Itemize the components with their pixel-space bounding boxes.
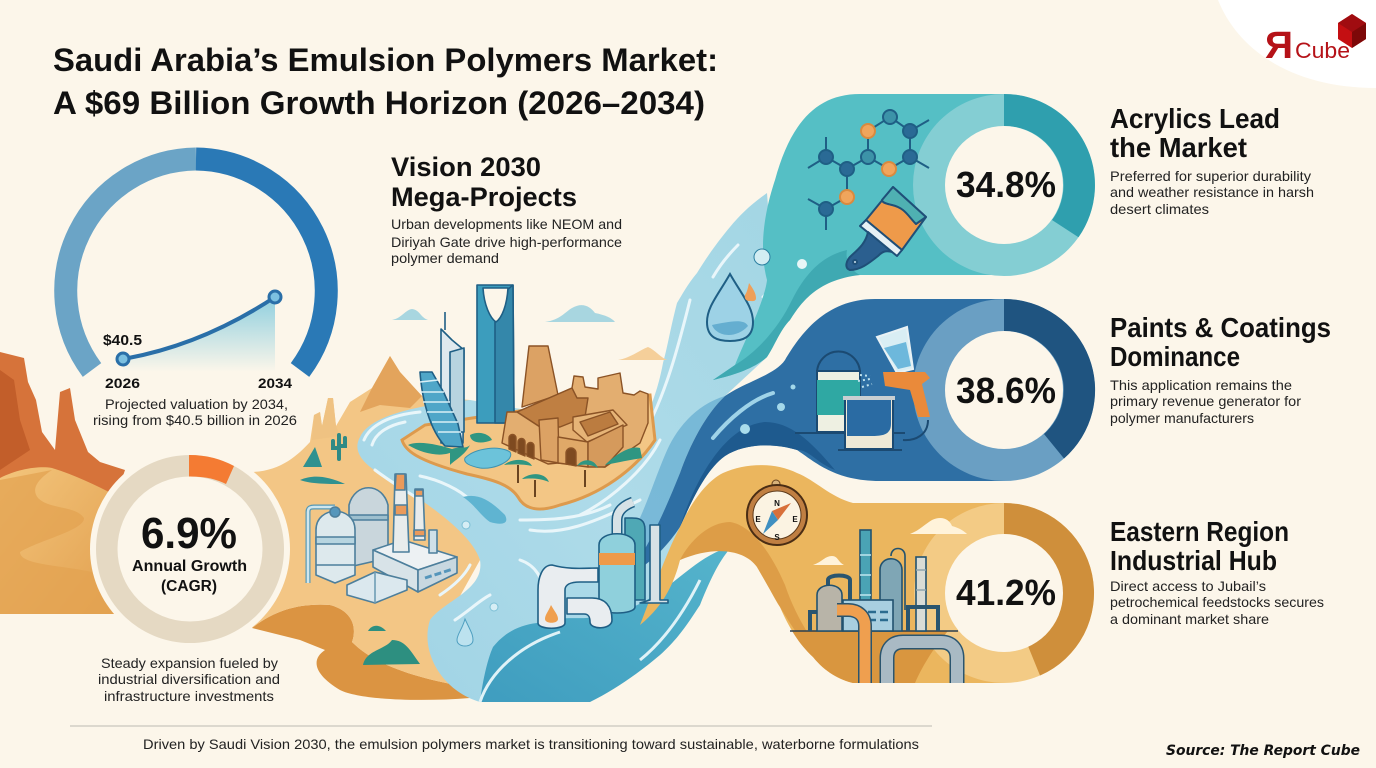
- text: Acrylics description: and weather resistance in harsh: [1110, 184, 1314, 200]
- gauge caption: Projected valuation by 2034,: [105, 396, 288, 412]
- heading: Vision 2030: Mega-Projects: [391, 182, 577, 212]
- chart: growth curve: [117, 291, 281, 372]
- donut: CAGR: Annual Growth: [132, 558, 247, 575]
- donut: 34.8%: [913, 94, 1095, 276]
- footer divider: [70, 725, 932, 727]
- icon: paint brush: [846, 187, 926, 270]
- icon: Diriyah mud-brick fort: [502, 346, 648, 467]
- sand ground with mountains and cactus: [250, 356, 560, 700]
- heading: Acrylics: [1110, 103, 1280, 163]
- icon: Kingdom Centre tower and skyscrapers: [420, 285, 514, 447]
- donut: 41.2%: 41.2%: [956, 572, 1056, 613]
- icon: compass: [747, 480, 807, 545]
- icon: compass: E: [755, 515, 761, 524]
- icon: pipelines: [837, 610, 957, 683]
- text: Paints description: This application remains the: [1110, 377, 1292, 393]
- heading: Paints: Paints & Coatings: [1110, 312, 1331, 343]
- text: Acrylics description: Preferred for superior durability: [1110, 168, 1311, 184]
- gauge: $40.5: [103, 332, 142, 349]
- CAGR caption: [98, 655, 280, 704]
- icon: clouds: [813, 518, 967, 565]
- heading: Vision 2030: Vision 2030: [391, 152, 541, 182]
- CAGR caption: infrastructure investments: [104, 688, 274, 704]
- text: Paints description: polymer manufacturers: [1110, 410, 1254, 426]
- island: [402, 395, 655, 509]
- icon: compass: E: [792, 515, 798, 524]
- heading: Paints: Dominance: [1110, 341, 1240, 372]
- text: Vision 2030 description: Urban developments like NEOM and: [391, 216, 622, 232]
- gauge: 2026: [105, 375, 140, 391]
- text: Acrylics description: desert climates: [1110, 201, 1209, 217]
- logo: Cube: [1295, 38, 1350, 63]
- icon: compass: N: [774, 499, 780, 508]
- icon: oasis palms and pond: [408, 433, 642, 497]
- heading: Paints: [1110, 312, 1331, 372]
- water stream: [357, 193, 793, 702]
- text: Eastern Region description: Direct access to Jubail’s: [1110, 578, 1266, 594]
- heading: Vision 2030: [391, 152, 577, 212]
- title: A $69 Billion Growth Horizon (2026–2034): [53, 85, 705, 121]
- text: Paints description: [1110, 377, 1301, 426]
- text: Paints description: primary revenue generator for: [1110, 393, 1301, 409]
- logo: Я: [1265, 25, 1293, 67]
- icon: molecule: [808, 110, 929, 230]
- donut: 34.8%: 34.8%: [956, 164, 1056, 205]
- gauge: [66, 159, 326, 391]
- icon: cactus: [333, 435, 345, 459]
- icon: spray gun: [858, 327, 930, 440]
- donut: CAGR: [90, 449, 290, 649]
- text: Eastern Region description: [1110, 578, 1324, 627]
- heading: Acrylics: Acrylics Lead: [1110, 103, 1280, 134]
- gauge caption: [93, 396, 297, 428]
- text: Eastern Region description: a dominant market share: [1110, 611, 1269, 627]
- desert scenery: rocks and dunes: [0, 352, 125, 614]
- text: Vision 2030 description: [391, 216, 622, 266]
- title: [53, 42, 718, 121]
- panel: tan eastern region: [640, 465, 1094, 683]
- donut: 38.6%: [913, 299, 1095, 481]
- source: Source: The Report Cube: [1166, 743, 1360, 759]
- heading: Eastern Region: [1110, 516, 1289, 576]
- title: Saudi Arabia’s Emulsion Polymers Market:: [53, 42, 718, 78]
- gauge: 2034: [258, 375, 292, 391]
- heading: Acrylics: the Market: [1110, 132, 1247, 163]
- icon: paint bucket: [795, 352, 905, 433]
- panel: teal acrylics: [713, 94, 1095, 380]
- icon: paint can: [838, 398, 902, 450]
- heading: Eastern Region: Eastern Region: [1110, 516, 1289, 547]
- donut: CAGR: (CAGR): [161, 578, 217, 595]
- logo: [1218, 0, 1376, 88]
- text: Eastern Region description: petrochemical feedstocks secures: [1110, 594, 1324, 610]
- icon: water drop: [707, 249, 807, 341]
- donut: 38.6%: 38.6%: [956, 370, 1056, 411]
- CAGR caption: Steady expansion fueled by: [101, 655, 278, 671]
- icon: pipes and tank in river: [538, 502, 668, 628]
- gauge caption: rising from $40.5 billion in 2026: [93, 412, 297, 428]
- panel: blue paints and coatings: [628, 299, 1095, 575]
- icon: refinery: [790, 530, 958, 631]
- icon: compass: S: [774, 533, 780, 542]
- donut: CAGR: 6.9%: [141, 509, 237, 558]
- icon: cloud tan: [618, 347, 667, 360]
- heading: Eastern Region: Industrial Hub: [1110, 545, 1277, 576]
- CAGR caption: industrial diversification and: [98, 671, 280, 687]
- text: Acrylics description: [1110, 168, 1314, 217]
- icon: clouds sky: [392, 305, 615, 322]
- donut: 41.2%: [914, 503, 1094, 683]
- footer text: Driven by Saudi Vision 2030, the emulsion polymers market is transitioning toward sustainable, waterborne formulations: [143, 736, 919, 752]
- text: Vision 2030 description: polymer demand: [391, 250, 499, 266]
- icon: factory storage tanks: [308, 474, 457, 603]
- text: Vision 2030 description: Diriyah Gate drive high-performance: [391, 234, 622, 250]
